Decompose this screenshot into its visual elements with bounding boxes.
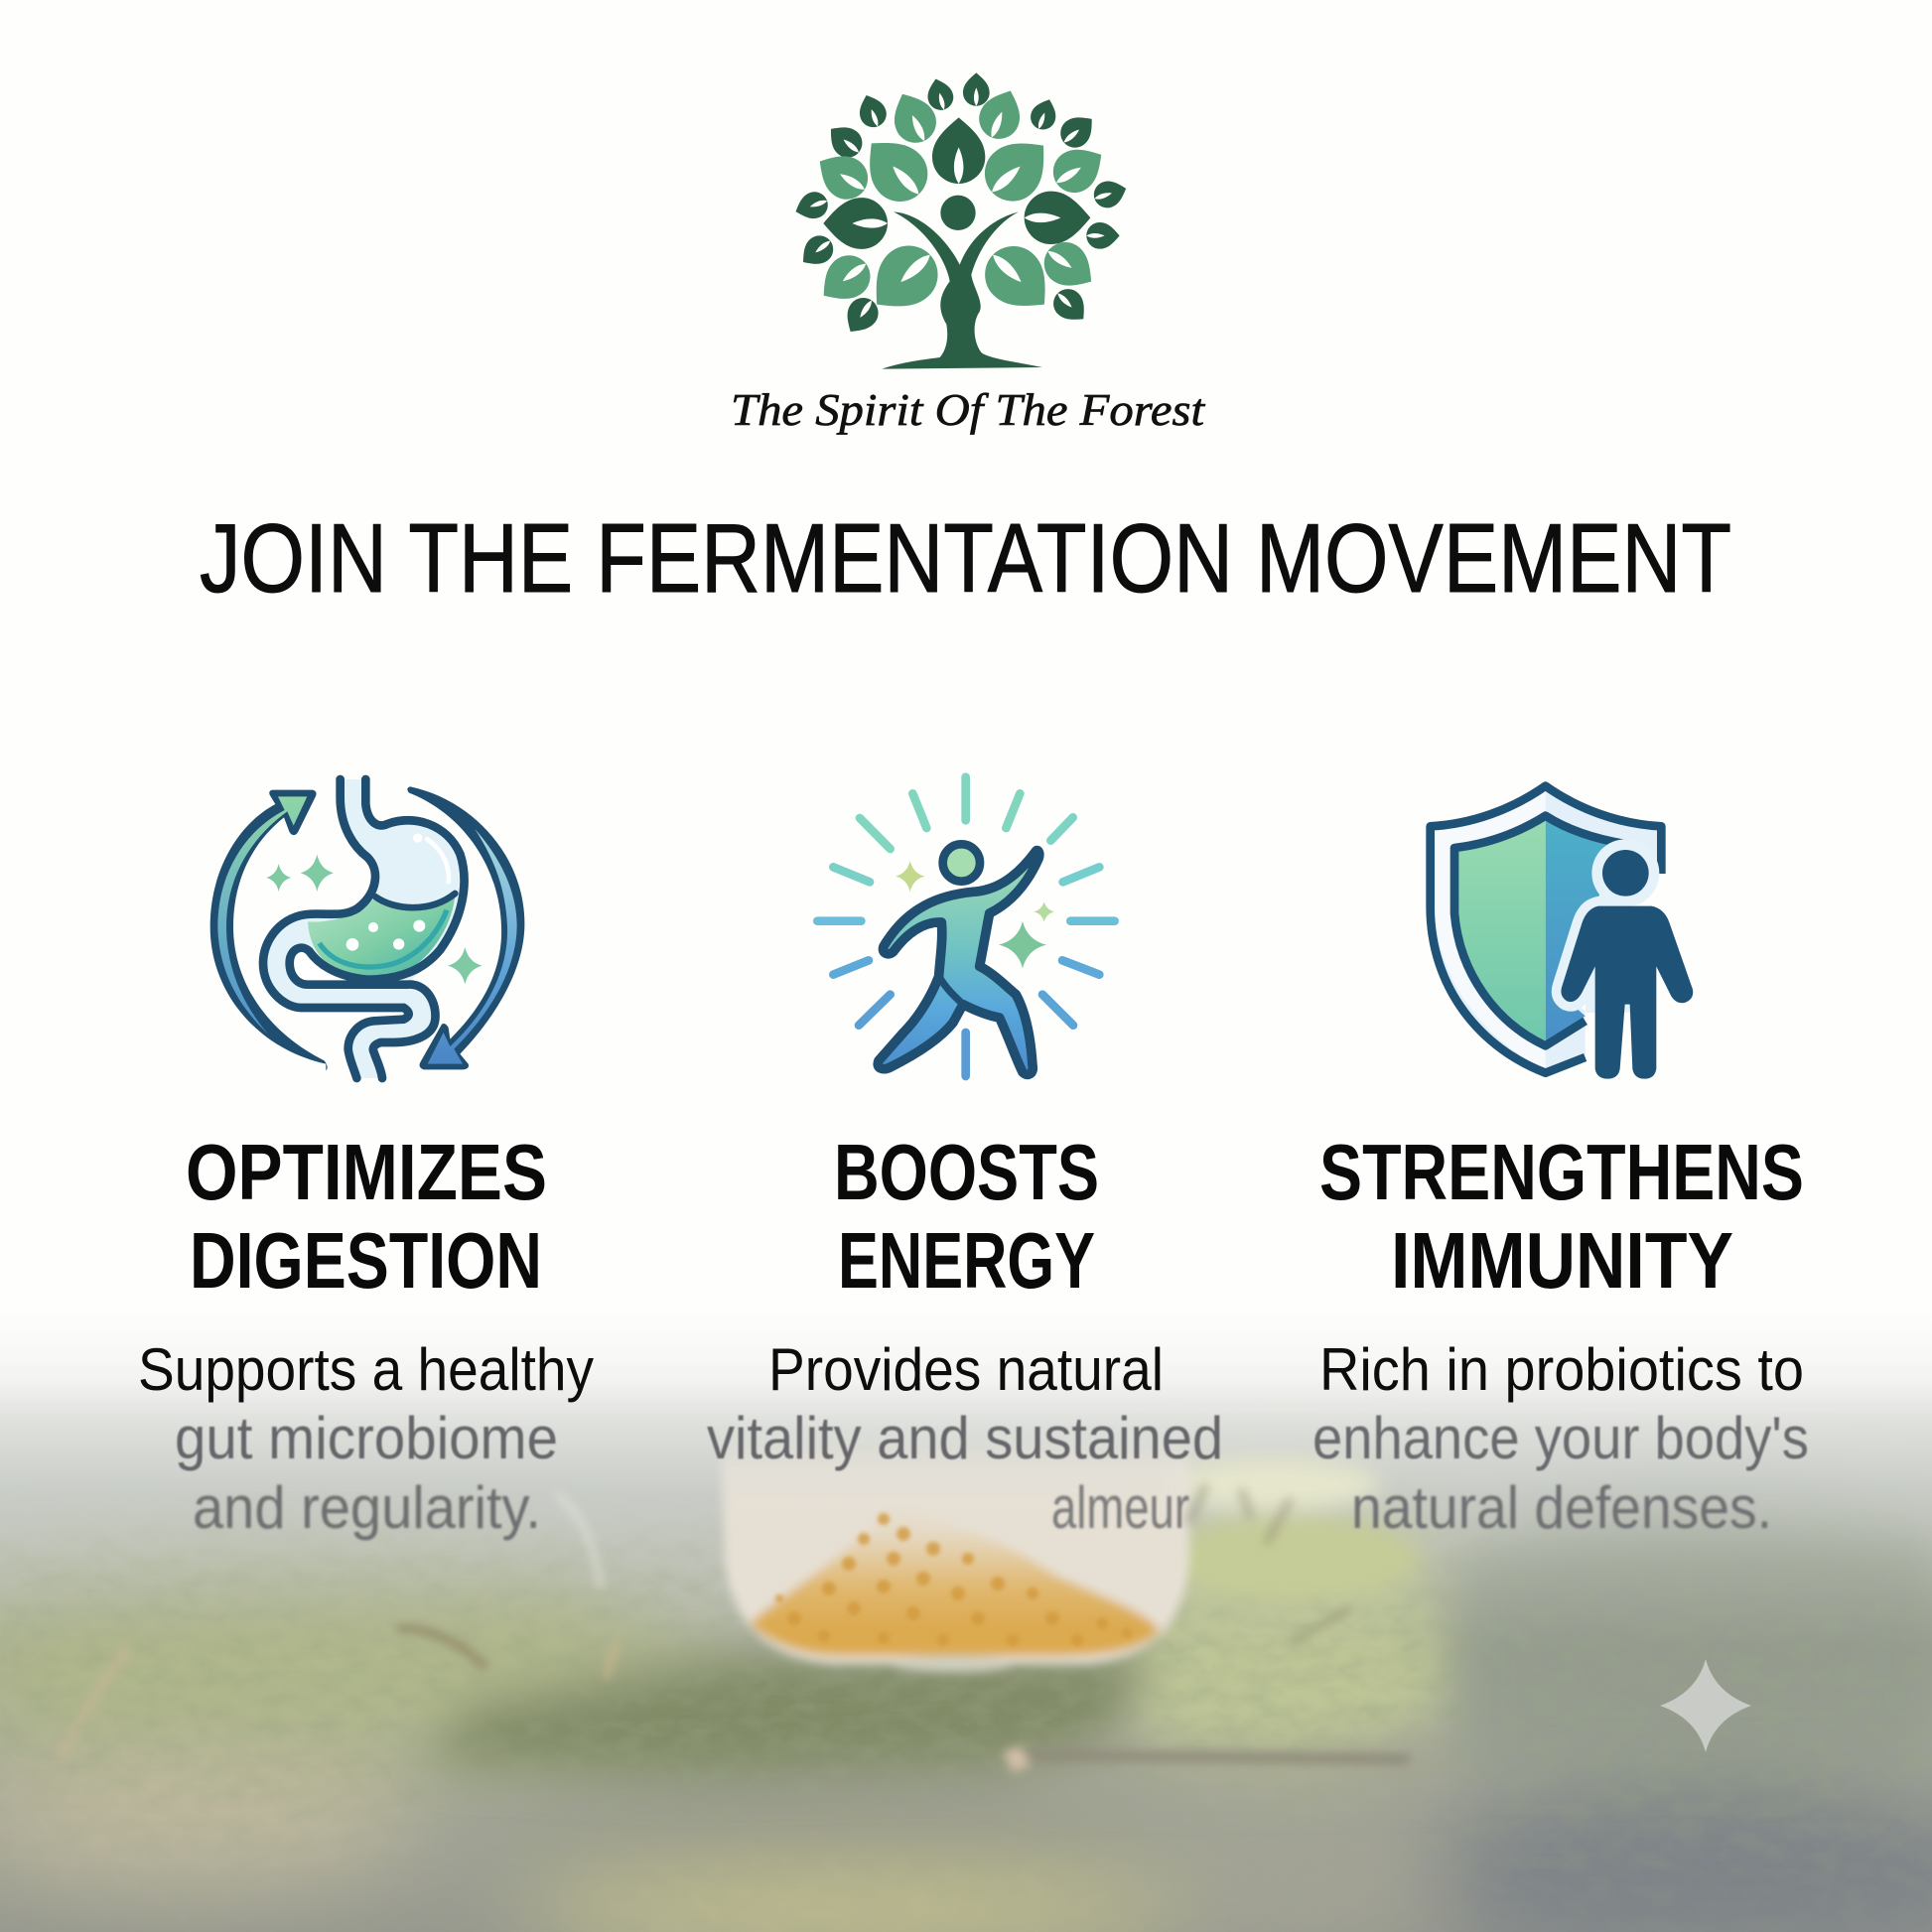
icon: energetic figure with rays (817, 777, 1115, 1076)
text: immunity description (1312, 1336, 1809, 1541)
watermark sparkle (1660, 1659, 1751, 1752)
heading: optimizes digestion: DIGESTION (190, 1216, 542, 1305)
heading: boosts energy (834, 1128, 1099, 1305)
text: immunity description: natural defenses. (1351, 1474, 1772, 1541)
panel: optimizes digestion (138, 779, 594, 1541)
panel: boosts energy (707, 777, 1223, 1541)
icon: stomach with circular arrows (210, 779, 524, 1078)
text: energy description: almeur (1051, 1474, 1189, 1541)
heading: strengthens immunity (1319, 1128, 1804, 1305)
logo: tree (791, 72, 1130, 369)
text: digestion description: and regularity. (193, 1474, 541, 1541)
background: blurred forest moss photo with fermentation jar (0, 1311, 1932, 1932)
panel: strengthens immunity (1312, 786, 1809, 1541)
text: energy description: Provides natural (768, 1336, 1164, 1403)
text: energy description: vitality and sustained (707, 1405, 1223, 1471)
heading: boosts energy: ENERGY (838, 1216, 1095, 1305)
heading: optimizes digestion: OPTIMIZES (186, 1128, 547, 1216)
heading: strengthens immunity: IMMUNITY (1391, 1216, 1733, 1305)
text: immunity description: enhance your body's (1312, 1405, 1809, 1471)
text: digestion description (138, 1336, 594, 1541)
heading: optimizes digestion (186, 1128, 547, 1305)
text: digestion description: Supports a healthy (138, 1336, 594, 1403)
logo wordmark: The Spirit Of The Forest (731, 384, 1205, 435)
heading: strengthens immunity: STRENGTHENS (1319, 1128, 1804, 1216)
icon: shield with person (1431, 786, 1693, 1079)
text: immunity description: Rich in probiotics to (1319, 1336, 1804, 1403)
text: digestion description: gut microbiome (175, 1405, 558, 1471)
text: energy description (707, 1336, 1223, 1541)
heading: boosts energy: BOOSTS (834, 1128, 1099, 1216)
